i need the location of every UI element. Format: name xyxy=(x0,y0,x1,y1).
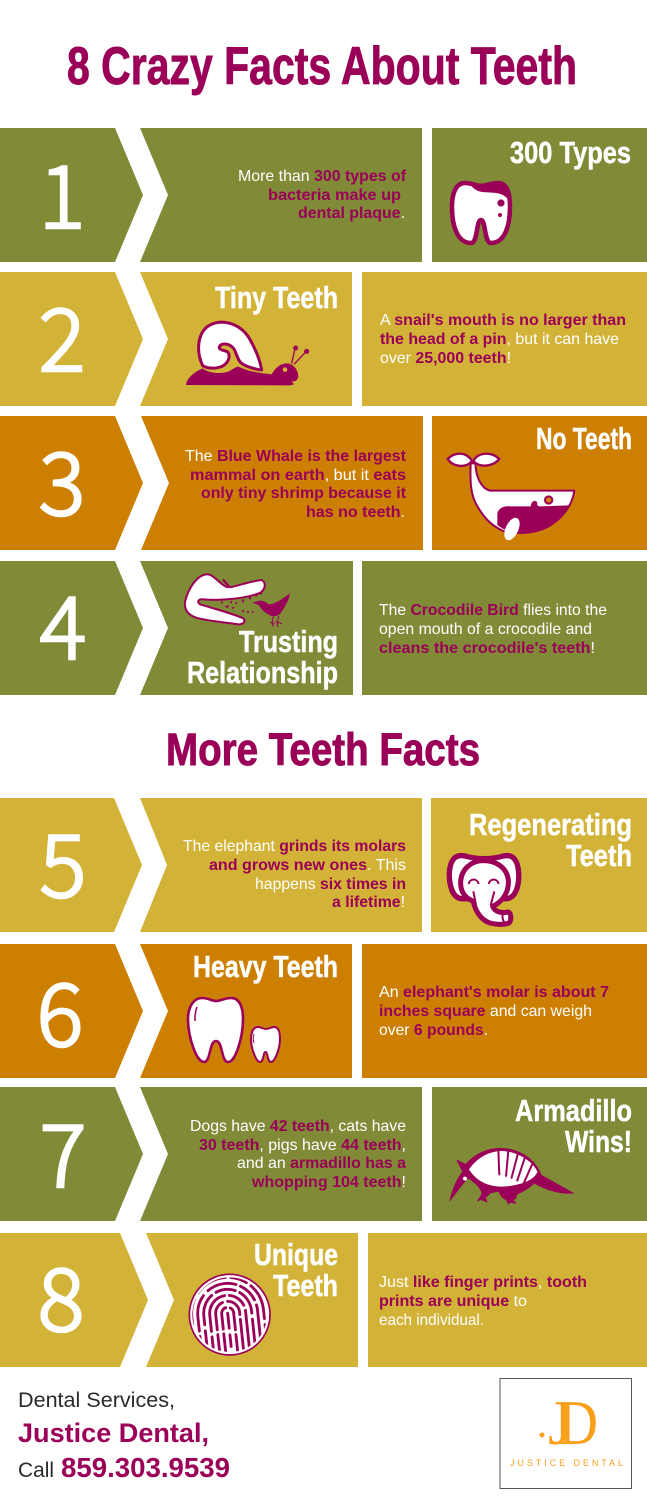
number arrow 8 xyxy=(0,1231,148,1367)
logo: Justice Dental: D xyxy=(558,1387,598,1458)
heading panel 7 xyxy=(432,1087,647,1221)
text panel 2: over 25,000 teeth! xyxy=(380,350,511,367)
text panel 3: The Blue Whale is the largest xyxy=(185,448,407,465)
text panel 3: mammal on earth, but it eats xyxy=(190,467,406,484)
heading panel 2 xyxy=(140,272,352,406)
number arrow 5 xyxy=(0,797,142,932)
number arrow 2: 2 xyxy=(39,271,85,397)
icon: snail xyxy=(186,322,309,385)
number arrow 7: 7 xyxy=(40,1087,86,1213)
icon: fingerprint xyxy=(188,1274,270,1360)
text panel 7: 30 teeth, pigs have 44 teeth, xyxy=(199,1137,406,1154)
text panel 8 xyxy=(368,1233,647,1367)
icon: armadillo xyxy=(449,1148,574,1205)
number arrow 7 xyxy=(0,1087,143,1221)
panel: fact 5 xyxy=(0,797,647,932)
heading panel 5: Teeth xyxy=(566,838,632,873)
number arrow 1: 1 xyxy=(39,128,85,254)
text panel 5: happens six times in xyxy=(255,876,406,893)
number arrow 6 xyxy=(0,944,143,1078)
number arrow 8: 8 xyxy=(38,1231,84,1357)
heading panel 4: Trusting xyxy=(239,624,338,659)
footer: contact details: Call xyxy=(18,1459,54,1482)
text panel 2: A snail's mouth is no larger than xyxy=(380,312,626,329)
heading panel 6 xyxy=(140,944,352,1078)
icon: tooth with plaque xyxy=(452,183,510,243)
text panel 4: The Crocodile Bird flies into the xyxy=(379,602,607,619)
icon: elephant xyxy=(449,856,519,924)
number arrow 2 xyxy=(0,271,143,406)
heading panel 7: Wins! xyxy=(565,1124,632,1159)
panel: fact 8 xyxy=(0,1231,647,1367)
panel: fact 6 xyxy=(0,944,647,1078)
text panel 6: An elephant's molar is about 7 xyxy=(379,984,609,1001)
heading panel 8: Unique xyxy=(254,1237,338,1272)
text panel 5: The elephant grinds its molars xyxy=(183,838,406,855)
panel: fact 3 xyxy=(0,415,647,550)
text panel 3: has no teeth. xyxy=(306,504,405,521)
text panel 5: and grows new ones. This xyxy=(209,857,406,874)
text panel 6 xyxy=(362,944,647,1078)
number arrow 6: 6 xyxy=(37,946,83,1072)
number arrow 3 xyxy=(0,415,143,550)
number arrow 5: 5 xyxy=(40,797,86,923)
number arrow 4 xyxy=(0,559,143,695)
logo: Justice Dental: JUSTICE DENTAL xyxy=(510,1458,623,1468)
number arrow 3: 3 xyxy=(39,415,85,541)
section heading: More Teeth Facts xyxy=(166,724,480,775)
panel: fact 2 xyxy=(0,271,647,406)
text panel 6: over 6 pounds. xyxy=(379,1022,488,1039)
text panel 4: cleans the crocodile's teeth! xyxy=(379,640,595,657)
icon: whale xyxy=(448,454,574,543)
heading panel 8 xyxy=(146,1233,358,1367)
text panel 1 xyxy=(140,128,422,262)
text panel 8: each individual. xyxy=(379,1312,484,1329)
heading panel 5 xyxy=(431,798,647,932)
panel: fact 7 xyxy=(0,1087,647,1221)
panel: fact 1 xyxy=(0,128,647,262)
heading panel 3 xyxy=(432,416,647,550)
icon: large and small molars xyxy=(188,998,280,1062)
heading panel 4: Relationship xyxy=(187,655,338,690)
text panel 8: prints are unique to xyxy=(379,1293,527,1310)
text panel 6: inches square and can weigh xyxy=(379,1003,592,1020)
text panel 3 xyxy=(141,416,423,550)
text panel 4 xyxy=(362,561,647,695)
heading panel 8: Teeth xyxy=(273,1268,338,1303)
number arrow 1 xyxy=(0,128,143,262)
text panel 1: More than 300 types of xyxy=(238,168,407,185)
text panel 7: and an armadillo has a xyxy=(237,1155,406,1172)
heading panel 6: Heavy Teeth xyxy=(193,949,338,984)
text panel 2: the head of a pin, but it can have xyxy=(380,331,619,348)
footer: contact details: Justice Dental, xyxy=(18,1418,209,1448)
text panel 5: a lifetime! xyxy=(332,894,405,911)
number arrow 4: 4 xyxy=(40,559,86,685)
text panel 8: Just like finger prints, tooth xyxy=(379,1274,587,1291)
text panel 3: only tiny shrimp because it xyxy=(201,485,407,502)
icon: crocodile and bird xyxy=(185,574,290,627)
footer: contact details: Dental Services, xyxy=(18,1389,175,1412)
text panel 1: dental plaque. xyxy=(298,205,405,222)
footer: contact details xyxy=(18,1389,230,1483)
heading panel 1 xyxy=(432,128,647,262)
heading panel 4 xyxy=(140,561,353,695)
text panel 7 xyxy=(140,1087,422,1221)
footer: contact details: 859.303.9539 xyxy=(61,1452,230,1483)
heading panel 2: Tiny Teeth xyxy=(215,280,338,315)
logo: Justice Dental: J xyxy=(548,1387,573,1458)
panel: fact 4 xyxy=(0,559,647,695)
text panel 1: bacteria make up xyxy=(268,187,401,204)
text panel 2 xyxy=(362,272,647,406)
logo: Justice Dental xyxy=(500,1378,632,1488)
text panel 5 xyxy=(140,798,422,932)
text panel 7: whopping 104 teeth! xyxy=(251,1174,406,1191)
text panel 4: open mouth of a crocodile and xyxy=(379,621,592,638)
text panel 7: Dogs have 42 teeth, cats have xyxy=(190,1118,406,1135)
